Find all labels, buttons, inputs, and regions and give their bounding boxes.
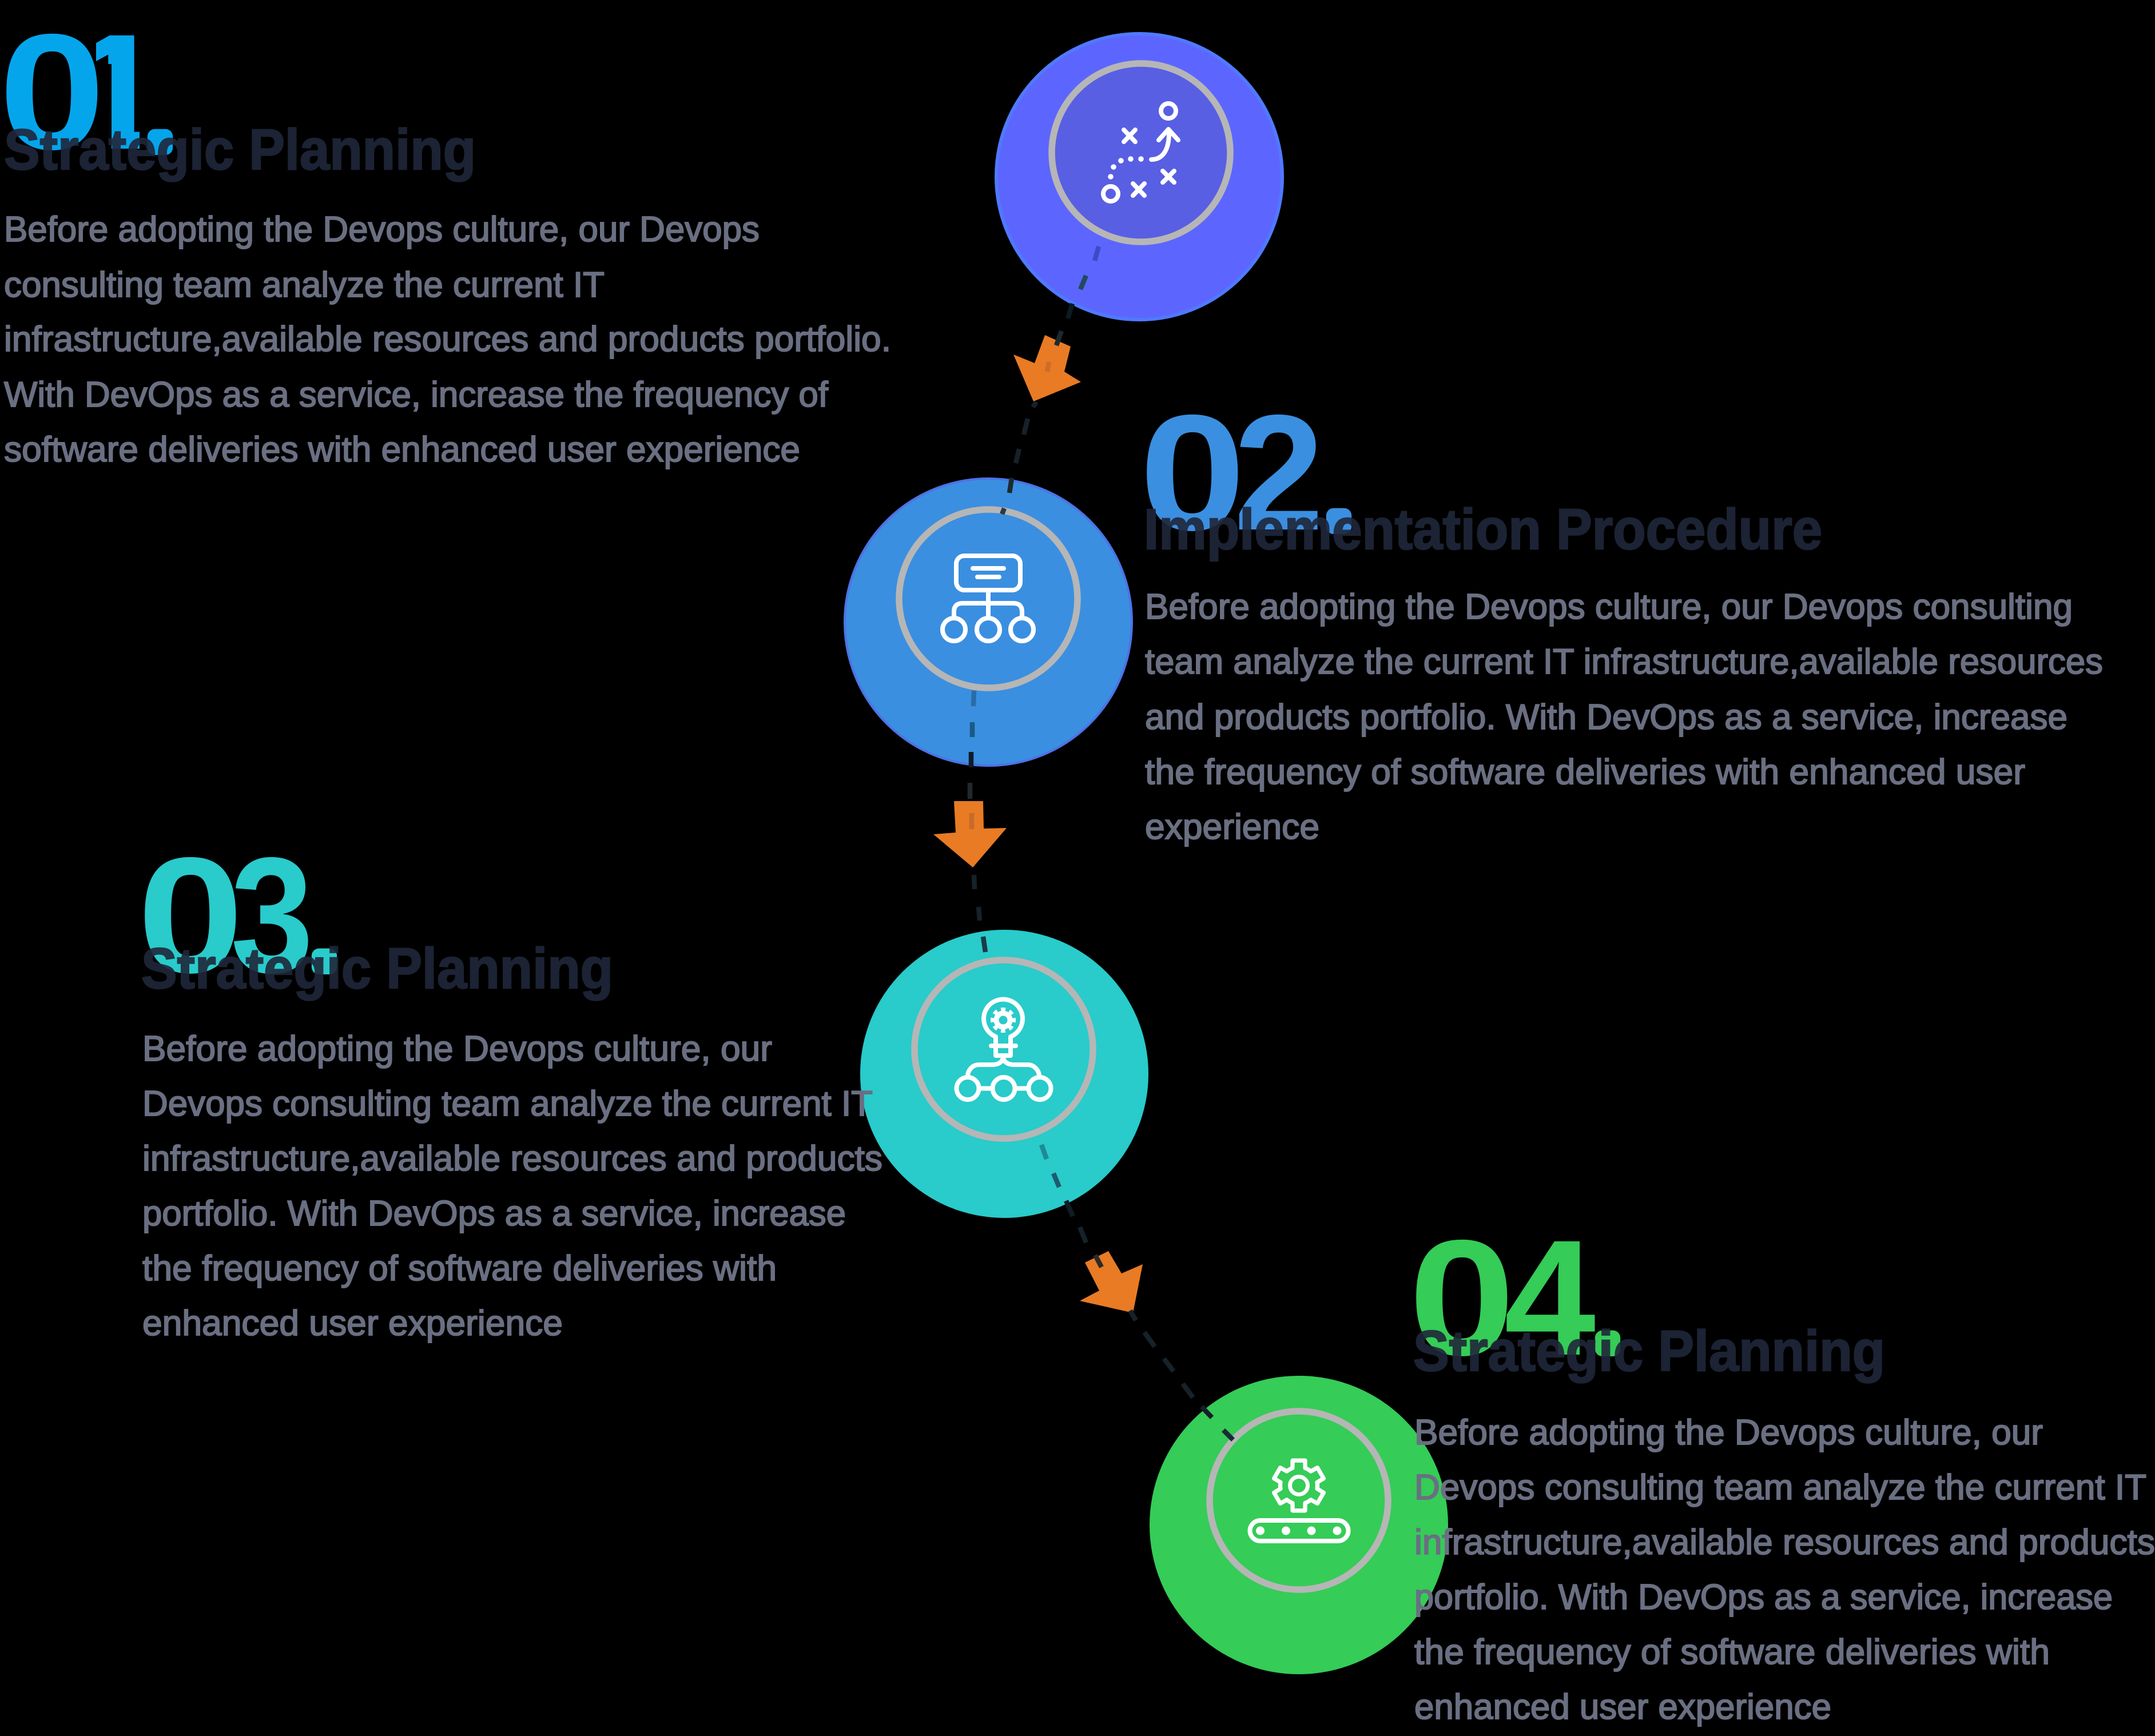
number: 01: . — [150, 80, 170, 164]
text block: step 01 description: Before adopting the Devops culture, our Devops — [4, 210, 760, 249]
arrow: step 01 to step 02 — [1013, 335, 1081, 401]
text block: step 03 description: Devops consulting team analyze the current IT — [142, 1084, 873, 1124]
heading: Implementation Procedure: Implementation Procedure — [1144, 497, 1822, 562]
text block: step 02 description: and products portfolio. With DevOps as a service, increase — [1145, 698, 2067, 737]
connector: dashed line step 02 to step 03 — [970, 691, 985, 952]
text block: step 02 description: the frequency of software deliveries with enhanced user — [1145, 752, 2025, 792]
text block: step 04 description: the frequency of software deliveries with — [1414, 1633, 2050, 1672]
number: 04: 4 — [1504, 1206, 1597, 1390]
text block: step 01 description: software deliveries with enhanced user experience — [4, 430, 800, 469]
text block: step 04 description: Before adopting the Devops culture, our — [1414, 1413, 2043, 1452]
number: 02: . — [1329, 459, 1349, 543]
number: 01 — [6, 33, 173, 155]
panel: step 04 strategic planning — [1150, 1206, 2155, 1727]
icon: light bulb with gear and nodes — [956, 1000, 1051, 1100]
number: 01: 0 — [0, 0, 105, 184]
heading: Strategic Planning: Strategic Planning — [4, 118, 476, 182]
number: 01: 1 — [64, 0, 169, 184]
text block: step 01 description: infrastructure,available resources and products portfolio. — [4, 320, 891, 359]
connector: dashed line step 03 to step 04 — [1041, 1145, 1233, 1440]
text block: step 04 description: enhanced user experience — [1414, 1687, 1831, 1727]
circle: step 03 — [860, 930, 1148, 1218]
number: 02 — [1139, 381, 1349, 565]
text block: step 01 description: consulting team analyze the current IT — [4, 265, 605, 305]
heading: Strategic Planning: Strategic Planning — [1413, 1319, 1885, 1383]
ring: step 02 — [899, 509, 1078, 688]
circle: step 01 — [996, 34, 1282, 320]
text block: step 01 description — [4, 210, 891, 469]
text block: step 03 description — [142, 1029, 882, 1343]
ring: step 04 — [1210, 1411, 1388, 1590]
panel: step 02 implementation procedure — [845, 381, 2103, 847]
icon: gear over conveyor belt — [1250, 1460, 1349, 1541]
ring: step 03 — [915, 960, 1093, 1138]
text block: step 03 description: the frequency of software deliveries with — [142, 1249, 777, 1288]
circle: step 04 — [1150, 1376, 1448, 1674]
number: 04: . — [1597, 1281, 1618, 1365]
text block: step 02 description: team analyze the current IT infrastructure,available resources — [1145, 642, 2103, 682]
text block: step 02 description: experience — [1145, 807, 1319, 847]
text block: step 02 description — [1145, 587, 2103, 847]
number: 03: . — [314, 899, 335, 983]
text block: step 03 description: portfolio. With DevOps as a service, increase — [142, 1194, 846, 1233]
number: 03: 0 — [137, 823, 244, 1008]
panel: step 01 strategic planning — [0, 0, 1282, 469]
text block: step 04 description: Devops consulting team analyze the current IT — [1414, 1468, 2146, 1507]
ring with inner disc: step 01 — [1052, 63, 1230, 242]
number: 02: 0 — [1139, 381, 1246, 565]
text block: step 03 description: Before adopting the Devops culture, our — [142, 1029, 772, 1069]
panel: step 03 strategic planning — [137, 823, 1148, 1343]
number: 03: 3 — [230, 823, 313, 1008]
arrow: step 02 to step 03 — [933, 801, 1007, 867]
text block: step 03 description: enhanced user experience — [142, 1304, 563, 1343]
text block: step 04 description: portfolio. With DevOps as a service, increase — [1414, 1578, 2113, 1617]
icon: hierarchy chart — [943, 556, 1033, 641]
number: 02: 2 — [1234, 381, 1324, 565]
number: 04: 0 — [1409, 1206, 1515, 1390]
text block: step 04 description: infrastructure,available resources and products — [1414, 1523, 2155, 1562]
text block: step 04 description — [1414, 1413, 2155, 1727]
arrow: step 03 to step 04 — [1080, 1251, 1143, 1313]
number: 03 — [137, 823, 335, 1008]
circle: step 02 — [845, 479, 1132, 766]
number: 04 — [1409, 1206, 1618, 1390]
text block: step 03 description: infrastructure,available resources and products — [142, 1139, 882, 1178]
heading: Strategic Planning: Strategic Planning — [141, 937, 613, 1001]
icon: strategy play diagram — [1103, 103, 1178, 201]
text block: step 01 description: With DevOps as a service, increase the frequency of — [4, 375, 829, 415]
connector: dashed line step 01 to step 02 — [1002, 246, 1099, 514]
text block: step 02 description: Before adopting the Devops culture, our Devops consulting — [1145, 587, 2073, 627]
